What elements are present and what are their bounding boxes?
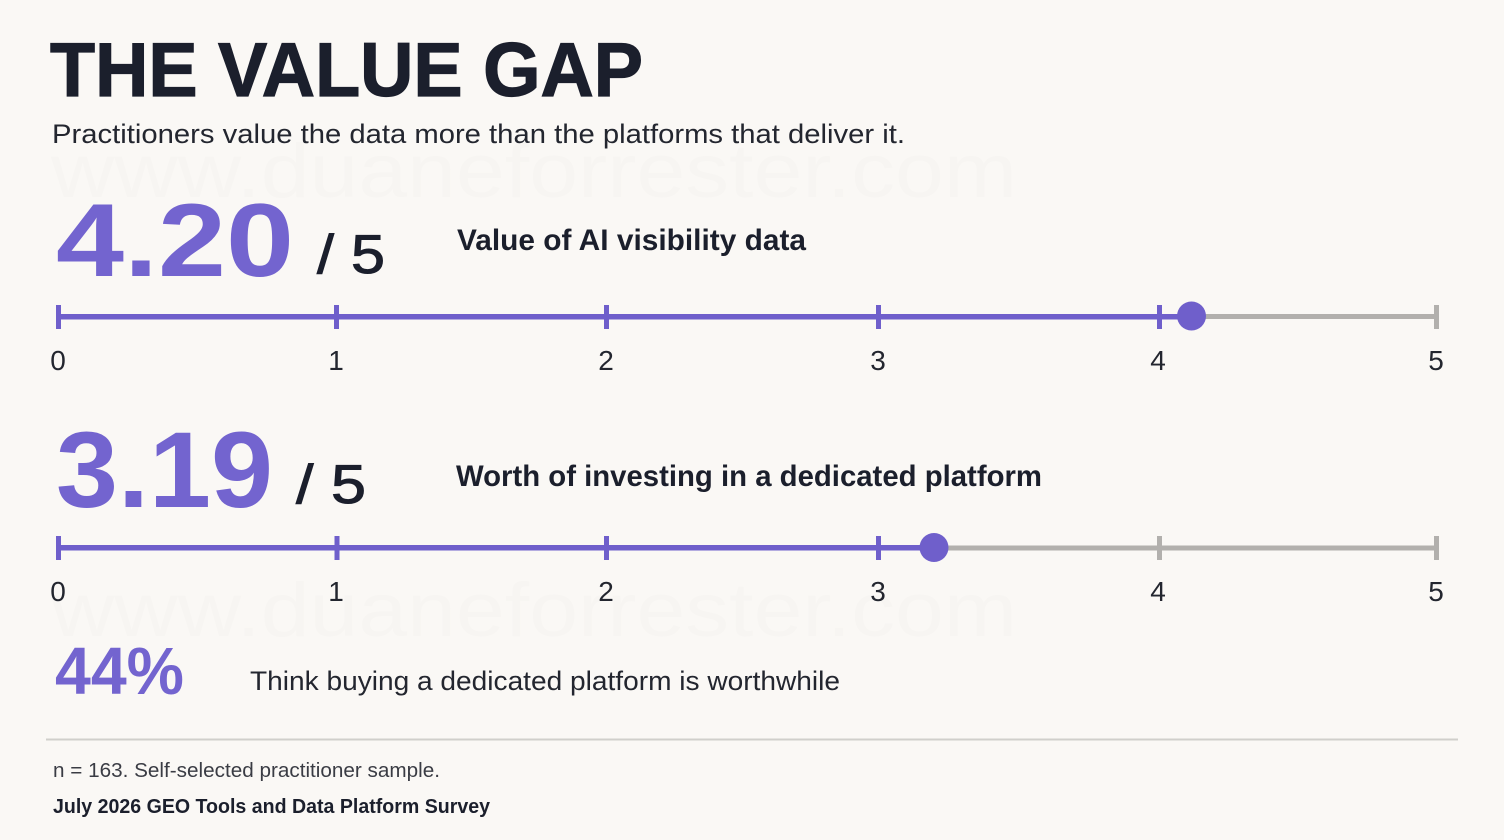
metric: value of AI visibility data [50, 183, 1444, 376]
metric label: Value of AI visibility data [457, 224, 806, 257]
footnote: sample: n = 163. Self-selected practitioner sample. [53, 760, 440, 782]
axis labels: 0 [50, 576, 66, 607]
axis labels: 1 [328, 345, 344, 376]
axis labels: 2 [598, 345, 614, 376]
metric label: Worth of investing in a dedicated platform [456, 460, 1042, 493]
axis labels: 5 [1428, 345, 1444, 376]
scale track 0 to 5 at 3.19 [56, 533, 1439, 562]
axis labels: 5 [1428, 576, 1444, 607]
axis labels: 4 [1150, 576, 1166, 607]
score: 3.19: 3.19 [56, 409, 273, 530]
axis labels: 0 [50, 345, 66, 376]
metric: worth of investing in a dedicated platform [50, 409, 1444, 607]
subtitle: Practitioners value the data more than the platforms that deliver it. [52, 119, 905, 149]
watermark: top: www.duaneforrester.com [50, 129, 1017, 214]
axis labels: 3 [870, 345, 886, 376]
scale suffix: / 5: / 5 [296, 453, 366, 515]
score: 44%: 44% [55, 634, 184, 709]
axis labels [50, 345, 1444, 376]
axis labels: 3 [870, 576, 886, 607]
score: 4.20: 4.20 [56, 183, 294, 299]
scale track 0 to 5 at 4.20 [56, 302, 1439, 330]
axis labels: 4 [1150, 345, 1166, 376]
axis labels [50, 576, 1444, 607]
axis labels: 1 [328, 576, 344, 607]
footnote: source: July 2026 GEO Tools and Data Platform Survey [53, 796, 491, 818]
watermark: bottom: www.duaneforrester.com [50, 568, 1017, 653]
metric: 44 percent [55, 634, 840, 709]
title: THE VALUE GAP [50, 28, 643, 113]
scale suffix: / 5: / 5 [317, 223, 385, 285]
metric label: Think buying a dedicated platform is worthwhile [250, 666, 840, 696]
axis labels: 2 [598, 576, 614, 607]
